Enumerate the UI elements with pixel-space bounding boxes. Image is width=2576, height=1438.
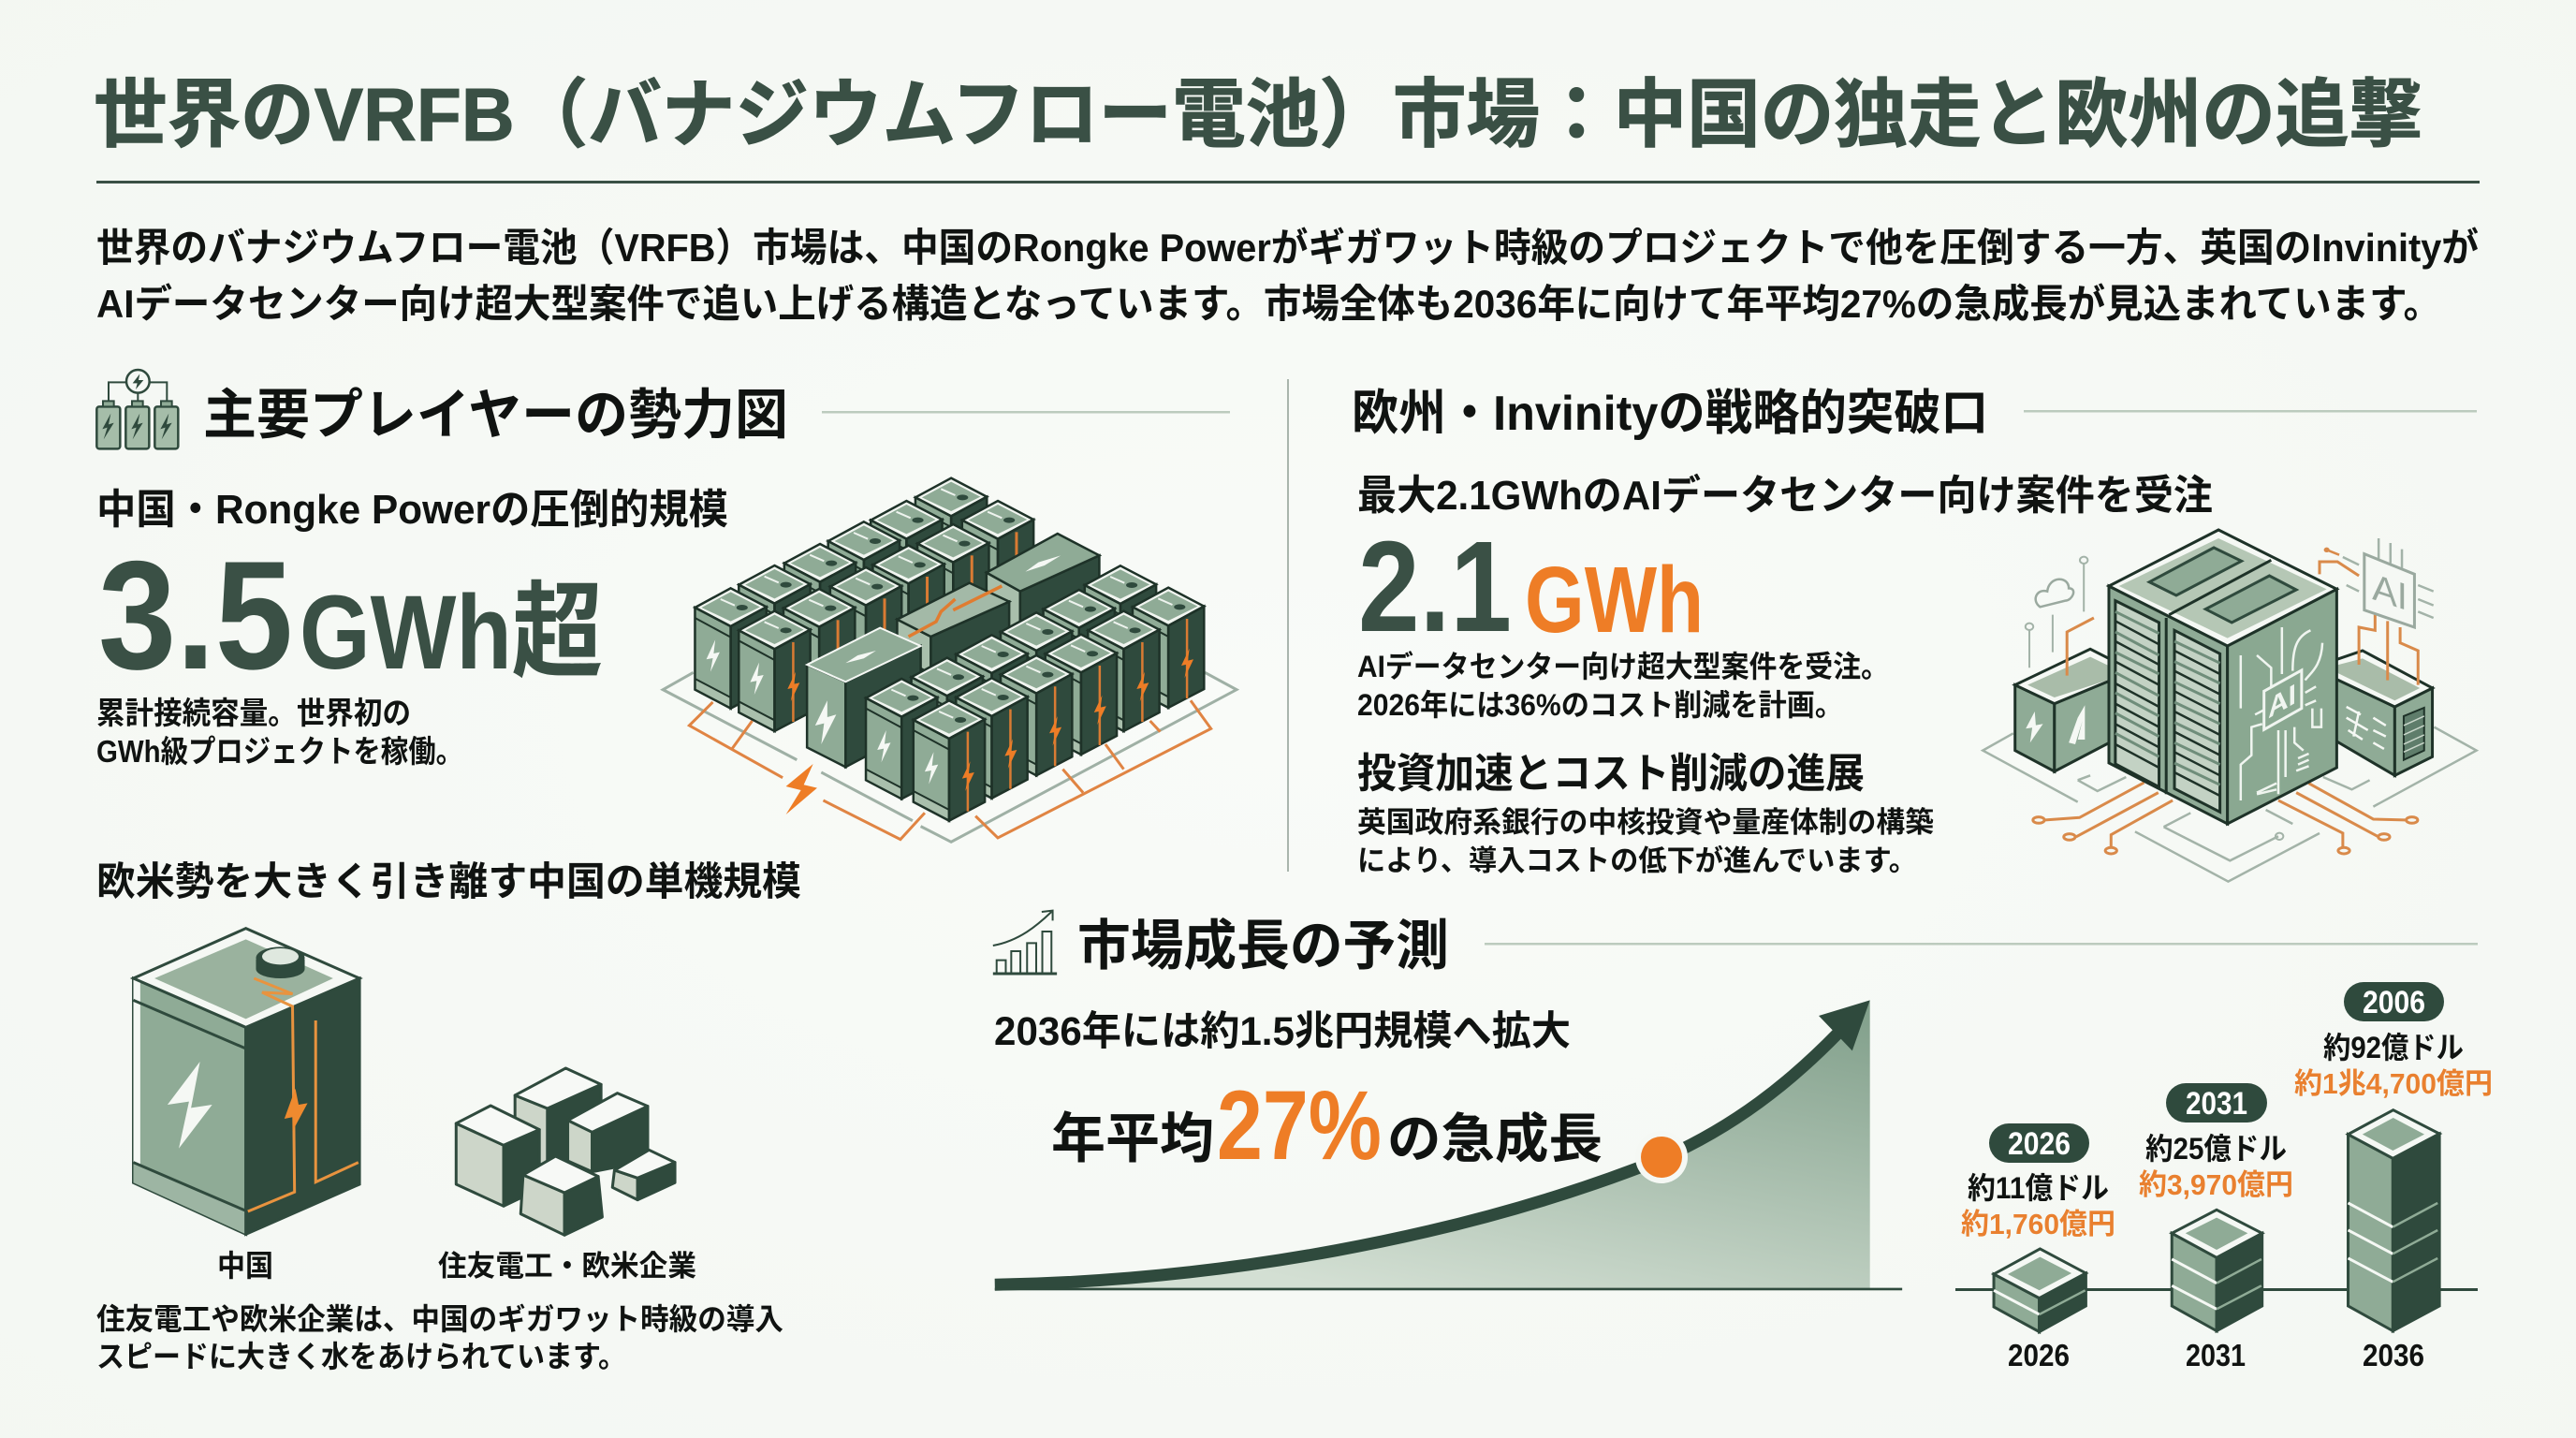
bar 2036: 約1兆4,700億円 xyxy=(2294,1067,2493,1100)
big number: 3.5GWh: 3.5 xyxy=(98,529,293,701)
bar 2026: 約11億ドル xyxy=(1968,1171,2109,1205)
heading: main players: 主要プレイヤーの勢力図 xyxy=(203,385,788,446)
bar 2026: 約1,760億円 xyxy=(1961,1208,2115,1240)
note: cumulative capacity xyxy=(96,696,463,769)
bar 2026: 2026 xyxy=(2008,1126,2071,1162)
bar 2031: 2031 xyxy=(2186,1338,2246,1372)
callout: 27% growth: 年平均 xyxy=(1051,1108,1214,1169)
illustration: AI data center: AI xyxy=(2372,565,2408,619)
subheading: 1.5 trillion yen: 2036年には約1.5兆円規模へ拡大 xyxy=(994,1009,1571,1054)
illustration: AI data center: AI xyxy=(2268,677,2296,725)
bar 2036 xyxy=(2294,982,2493,1372)
callout: 27% growth xyxy=(1051,1071,1603,1181)
note: AI data center order: AIデータセンター向け超大型案件を受注。 xyxy=(1357,650,1889,683)
bar 2031: 2031 xyxy=(2186,1086,2247,1122)
growth curve chart xyxy=(995,1000,1902,1290)
callout: 27% growth: 27% xyxy=(1217,1071,1382,1181)
note: cumulative capacity: 累計接続容量。世界初の xyxy=(96,696,411,730)
big number: 2.1GWh: 2.1 xyxy=(1358,515,1512,659)
subheading: unit scale comparison: 欧米勢を大きく引き離す中国の単機規模 xyxy=(96,859,801,903)
intro paragraph: AIデータセンター向け超大型案件で追い上げる構造となっています。市場全体も2036年に向けて年平均27%の急成長が見込まれています。 xyxy=(96,282,2441,326)
icon: growth chart xyxy=(993,911,1057,974)
bar 2036: 2006 xyxy=(2363,985,2425,1020)
subheading: Rongke Power: 中国・Rongke Powerの圧倒的規模 xyxy=(96,487,728,533)
title: 世界のVRFB（バナジウムフロー電池）市場：中国の独走と欧州の追撃 xyxy=(94,73,2422,156)
bar 2036: 約92億ドル xyxy=(2323,1031,2464,1064)
note: AI data center order xyxy=(1357,650,1889,722)
heading: Europe Invinity: 欧州・Invinityの戦略的突破口 xyxy=(1352,387,1988,441)
note: AI data center order: 2026年には36%のコスト削減を計画。 xyxy=(1357,688,1843,722)
big number: 3.5GWh xyxy=(98,529,603,701)
note: investment xyxy=(1357,806,1934,877)
subheading: 2.1GWh order: 最大2.1GWhのAIデータセンター向け案件を受注 xyxy=(1357,473,2213,519)
callout: 27% growth: の急成長 xyxy=(1387,1109,1603,1169)
label: Sumitomo and Western companies: 住友電工・欧米企業 xyxy=(438,1250,696,1283)
big number: 2.1GWh: GWh xyxy=(1525,548,1704,653)
big number: 2.1GWh xyxy=(1358,515,1704,659)
illustration: battery farm xyxy=(663,478,1237,842)
heading: market forecast: 市場成長の予測 xyxy=(1077,916,1449,976)
icon: batteries xyxy=(96,370,178,448)
note: deployment speed: 住友電工や欧米企業は、中国のギガワット時級の導入 xyxy=(96,1302,783,1336)
illustration: AI data center xyxy=(1983,530,2477,882)
bar 2031: 約25億ドル xyxy=(2145,1132,2287,1166)
label: China: 中国 xyxy=(217,1249,273,1283)
intro paragraph: 世界のバナジウムフロー電池（VRFB）市場は、中国のRongke Powerがギガワット時級のプロジェクトで他を圧倒する一方、英国のInvinityが xyxy=(96,226,2479,270)
bar 2026: 2026 xyxy=(2008,1338,2070,1372)
bar 2036: 2036 xyxy=(2363,1338,2424,1372)
note: investment: により、導入コストの低下が進んでいます。 xyxy=(1357,844,1917,877)
illustration: small cubes xyxy=(456,1068,675,1235)
bar 2031: 約3,970億円 xyxy=(2139,1168,2293,1201)
note: deployment speed: スピードに大きく水をあけられています。 xyxy=(96,1340,626,1373)
intro paragraph xyxy=(96,226,2479,326)
subheading: investment and cost reduction: 投資加速とコスト削減の進展 xyxy=(1357,751,1865,797)
big number: 3.5GWh: GWh超 xyxy=(300,574,603,691)
note: cumulative capacity: GWh級プロジェクトを稼働。 xyxy=(96,734,463,769)
note: investment: 英国政府系銀行の中核投資や量産体制の構築 xyxy=(1357,806,1934,839)
note: deployment speed xyxy=(96,1302,783,1373)
illustration: China large battery xyxy=(134,929,359,1234)
bar 2026 xyxy=(1961,1123,2115,1372)
bar 2031 xyxy=(2139,1083,2293,1372)
